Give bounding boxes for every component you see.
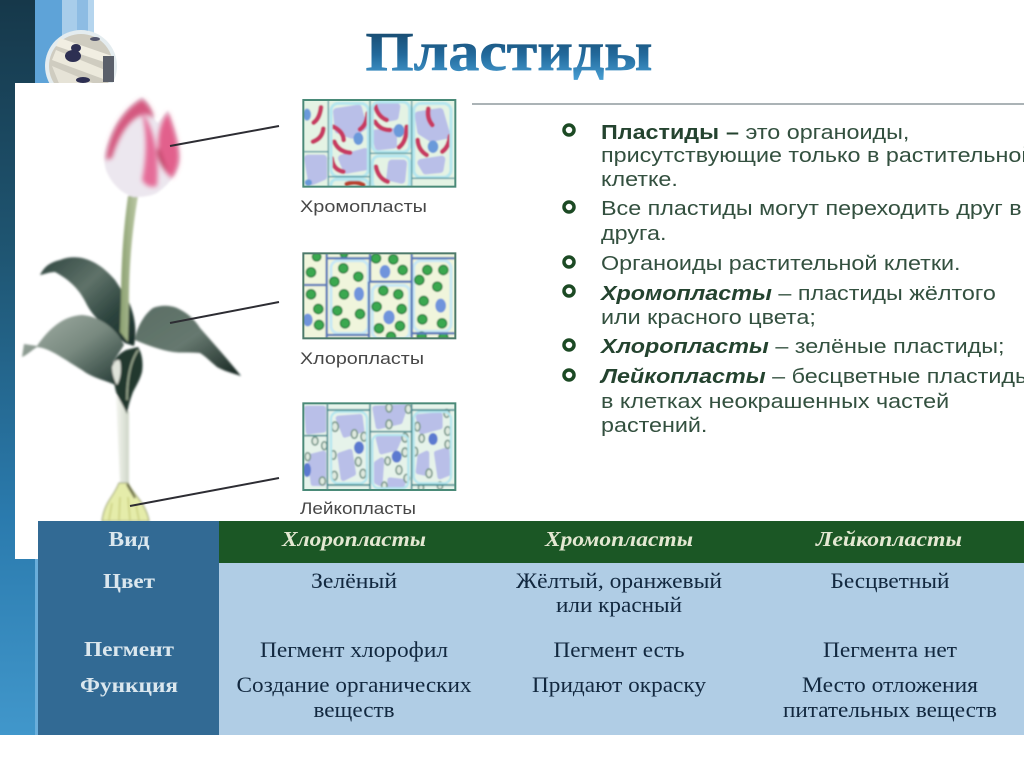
label: chromoplasts: Хромопласты bbox=[300, 197, 427, 216]
row labels: Вид bbox=[108, 527, 150, 551]
tulip upper left leaf bbox=[40, 257, 135, 346]
tulip white stalk bbox=[116, 395, 129, 484]
tulip bulb bbox=[102, 483, 149, 521]
bullet: leucoplasts: в клетках неокрашенных частей bbox=[601, 390, 949, 413]
table body bbox=[219, 563, 1024, 735]
column: chloroplasts: веществ bbox=[314, 697, 394, 722]
row labels: Цвет bbox=[103, 569, 156, 593]
bullet: transitions: Все пластиды могут переходить друг в bbox=[601, 197, 1022, 220]
row labels: Пегмент bbox=[84, 637, 175, 661]
background: left dark bar bbox=[0, 0, 38, 735]
column: chloroplasts: Зелёный bbox=[311, 568, 397, 593]
bullet: transitions: друга. bbox=[601, 222, 666, 245]
label: chloroplasts: Хлоропласты bbox=[300, 349, 424, 368]
tulip illustration bbox=[22, 97, 241, 521]
bullet: leucoplasts: Лейкопласты – бесцветные пластиды bbox=[599, 365, 1024, 388]
bullet: chromoplasts: Хромопласты – пластиды жёлтого bbox=[600, 282, 996, 305]
column: chromoplasts: или красный bbox=[556, 592, 682, 617]
cell diagram: chloroplasts bbox=[303, 250, 455, 342]
bullet: definition: Пластиды – это органоиды, bbox=[601, 121, 909, 144]
tulip flower bbox=[104, 97, 180, 197]
column: chromoplasts: Придают окраску bbox=[532, 672, 706, 697]
table header band bbox=[219, 521, 1024, 563]
pointer line: flower bbox=[170, 126, 279, 146]
bullet: leucoplasts bbox=[564, 365, 1024, 437]
bullet list bbox=[564, 121, 1024, 437]
column: leucoplasts bbox=[783, 568, 997, 722]
bullet: chromoplasts: или красного цвета; bbox=[601, 306, 816, 329]
column: leucoplasts: Место отложения bbox=[802, 672, 978, 697]
column headers: Лейкопласты bbox=[815, 527, 962, 551]
cell diagram: leucoplasts bbox=[303, 403, 455, 491]
row labels bbox=[80, 527, 178, 697]
bullet: leucoplasts: растений. bbox=[601, 414, 707, 437]
tulip left leaf bbox=[22, 315, 124, 386]
column: chromoplasts bbox=[516, 568, 722, 697]
column: chromoplasts: Пегмент есть bbox=[554, 637, 684, 662]
column headers: Хлоропласты bbox=[281, 527, 426, 551]
tulip centre leaf bbox=[112, 347, 143, 414]
table first column bbox=[38, 521, 219, 735]
bullet: definition: клетке. bbox=[601, 168, 678, 191]
column: chloroplasts: Пегмент хлорофил bbox=[260, 637, 448, 662]
bullet: transitions bbox=[564, 197, 1022, 245]
title: Пластиды bbox=[366, 21, 652, 82]
bullet: chloroplasts: Хлоропласты – зелёные пластиды; bbox=[600, 335, 1005, 358]
bullet: definition bbox=[564, 121, 1024, 191]
bullet: organoids: Органоиды растительной клетки. bbox=[601, 252, 961, 275]
white content panel bbox=[15, 83, 1024, 559]
column: chloroplasts bbox=[236, 568, 472, 722]
pointer line: bulb bbox=[130, 478, 279, 506]
tulip flower shading bbox=[106, 99, 179, 187]
column: leucoplasts: питательных веществ bbox=[783, 697, 997, 722]
icon: round photo badge bbox=[45, 30, 117, 83]
comparison table bbox=[38, 521, 1024, 735]
divider line bbox=[472, 103, 1024, 105]
background: blue stripes bbox=[35, 0, 94, 83]
column: leucoplasts: Бесцветный bbox=[830, 568, 950, 593]
tulip right leaf bbox=[135, 306, 241, 376]
column: leucoplasts: Пегмента нет bbox=[823, 637, 957, 662]
column headers: Хромопласты bbox=[544, 527, 693, 551]
column: chloroplasts: Создание органических bbox=[236, 672, 472, 697]
pointer line: leaf bbox=[170, 302, 279, 323]
column headers bbox=[281, 527, 962, 551]
bullet: chromoplasts bbox=[564, 282, 996, 329]
row labels: Функция bbox=[80, 673, 178, 697]
column: chromoplasts: Жёлтый, оранжевый bbox=[516, 568, 722, 593]
bullet: definition: присутствующие только в растительной bbox=[601, 144, 1024, 167]
label: leucoplasts: Лейкопласты bbox=[300, 499, 416, 518]
cell diagram: chromoplasts bbox=[303, 100, 455, 193]
tulip stem bbox=[120, 196, 138, 342]
